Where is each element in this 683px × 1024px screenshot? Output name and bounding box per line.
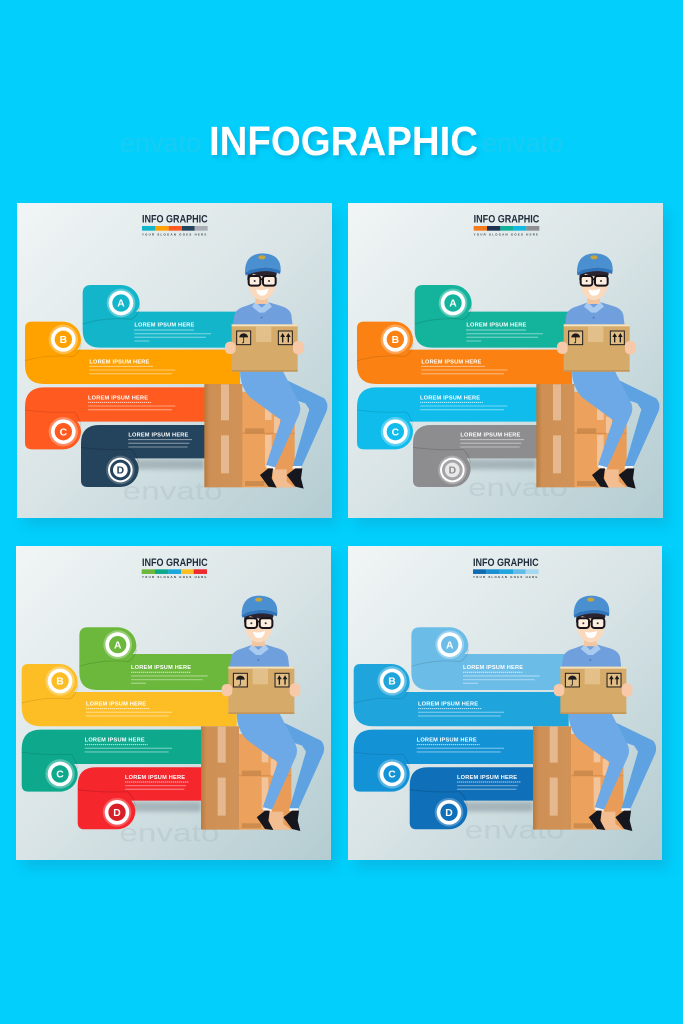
header: info graphic <box>473 557 539 579</box>
panel: green orange version <box>348 203 669 526</box>
band D <box>410 767 534 829</box>
illustration: courier on boxes <box>201 596 324 831</box>
band D: D <box>445 808 453 819</box>
band C <box>22 730 202 792</box>
band D: D <box>113 808 121 819</box>
header: info graphic: INFO GRAPHIC <box>474 214 540 226</box>
band D <box>81 425 205 487</box>
band D: D <box>117 466 125 477</box>
header: info graphic <box>474 214 540 236</box>
band A <box>415 285 568 348</box>
content: bands and courier <box>357 253 659 502</box>
content: bands and courier <box>354 596 656 844</box>
band A: A <box>117 299 125 310</box>
header: info graphic: INFO GRAPHIC <box>142 214 208 226</box>
band B: LOREM IPSUM HERE <box>86 702 146 708</box>
band D <box>413 425 537 487</box>
band C: LOREM IPSUM HERE <box>85 738 145 744</box>
header: info graphic: YOUR SLOGAN GOES HERE <box>473 575 537 579</box>
band D: LOREM IPSUM HERE <box>125 775 185 781</box>
band A: A <box>446 640 454 651</box>
band A: LOREM IPSUM HERE <box>466 323 527 329</box>
header: info graphic: YOUR SLOGAN GOES HERE <box>142 232 206 236</box>
band A: LOREM IPSUM HERE <box>134 323 195 329</box>
band D: LOREM IPSUM HERE <box>128 433 189 439</box>
header: info graphic: YOUR SLOGAN GOES HERE <box>142 575 206 579</box>
band C <box>357 387 537 449</box>
header: info graphic: YOUR SLOGAN GOES HERE <box>474 232 538 236</box>
band C: C <box>392 427 400 438</box>
band C: C <box>388 770 396 781</box>
panel: blue version <box>348 546 669 869</box>
watermark: envato <box>123 477 223 505</box>
band C: LOREM IPSUM HERE <box>420 395 480 401</box>
band A <box>83 285 236 348</box>
title: INFOGRAPHIC <box>209 118 478 164</box>
band D: LOREM IPSUM HERE <box>457 775 517 781</box>
band A: LOREM IPSUM HERE <box>131 665 191 671</box>
watermark: envato <box>119 820 219 848</box>
band B: LOREM IPSUM HERE <box>421 359 482 365</box>
band A <box>79 627 233 690</box>
watermark: envato <box>468 474 568 502</box>
panel: green yellow red version <box>16 546 337 869</box>
band D: D <box>449 466 457 477</box>
band A: LOREM IPSUM HERE <box>463 665 523 671</box>
band A <box>411 627 565 690</box>
band D: LOREM IPSUM HERE <box>460 433 521 439</box>
content: bands and courier <box>22 596 324 848</box>
band B <box>354 664 569 726</box>
header: info graphic <box>142 557 208 579</box>
header: info graphic: INFO GRAPHIC <box>473 557 539 569</box>
band B: LOREM IPSUM HERE <box>89 359 150 365</box>
band A: A <box>449 299 457 310</box>
band B: LOREM IPSUM HERE <box>418 702 478 708</box>
band B <box>22 664 237 726</box>
panel: teal orange version <box>17 203 338 526</box>
header: info graphic <box>142 214 208 236</box>
band B: B <box>388 677 396 688</box>
illustration: courier on boxes <box>536 253 659 489</box>
title shadow: INFOGRAPHIC <box>211 121 480 167</box>
watermark: right: envato <box>482 128 563 158</box>
header: info graphic: INFO GRAPHIC <box>142 557 208 569</box>
band B: B <box>60 335 67 346</box>
band C: LOREM IPSUM HERE <box>417 738 477 744</box>
band C: C <box>60 427 68 438</box>
band A: A <box>114 640 122 651</box>
illustration: courier on boxes <box>204 253 327 489</box>
band C: LOREM IPSUM HERE <box>88 395 148 401</box>
band B <box>25 322 240 384</box>
band C <box>25 387 205 449</box>
band C: C <box>56 770 64 781</box>
band D <box>78 767 202 829</box>
band B <box>357 322 572 384</box>
band B: B <box>392 335 399 346</box>
band B: B <box>56 677 64 688</box>
content: bands and courier <box>25 253 327 505</box>
watermark: left: envato <box>120 128 201 158</box>
illustration: courier on boxes <box>533 596 656 831</box>
band C <box>354 730 534 792</box>
watermark: envato <box>465 816 565 844</box>
